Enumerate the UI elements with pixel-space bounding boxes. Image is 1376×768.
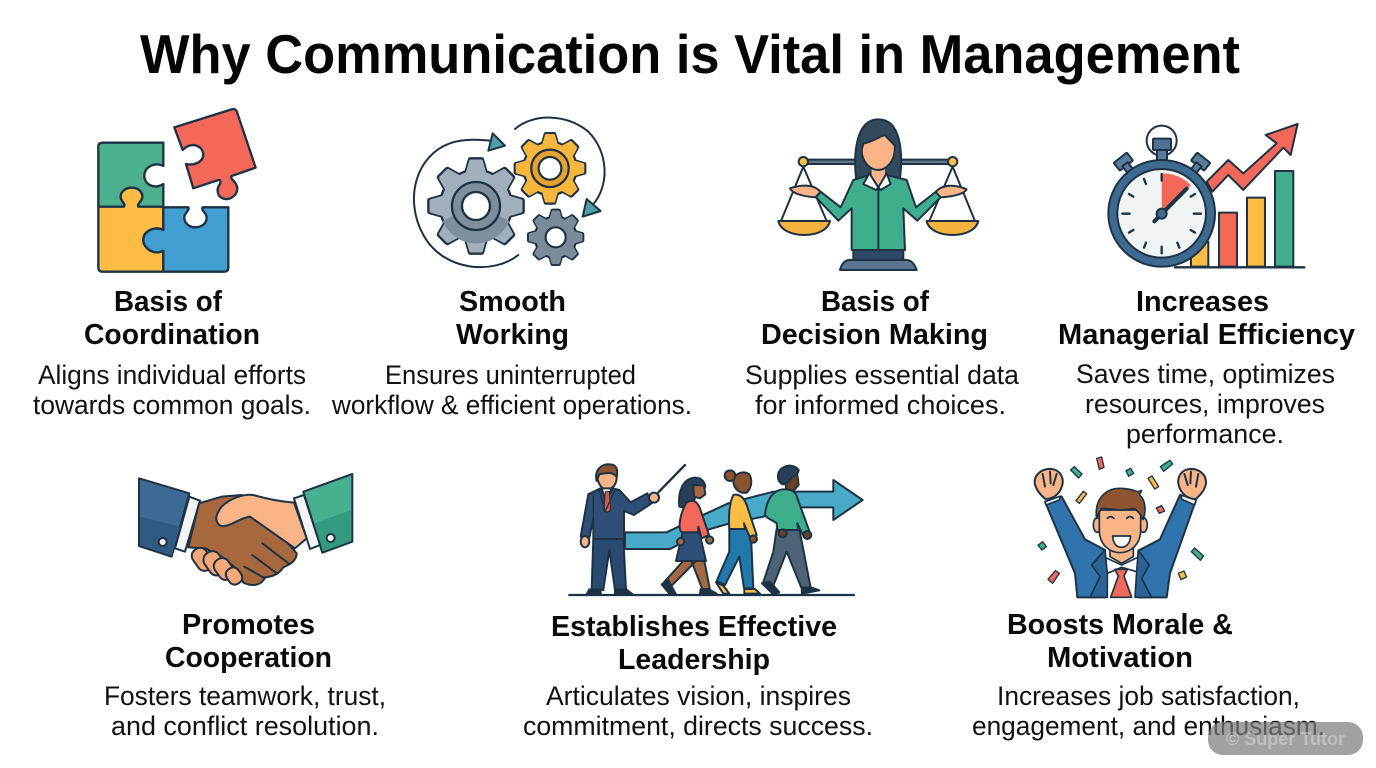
text: decision making description: Supplies essential data — [745, 360, 1019, 390]
heading: increases managerial efficiency: Managerial Efficiency — [1058, 319, 1355, 351]
watermark badge — [1208, 722, 1363, 755]
icon: gears with arrows — [414, 118, 605, 267]
icon: puzzle pieces — [98, 109, 256, 272]
icon: woman balancing scales — [778, 119, 978, 270]
heading: basis of decision making: Decision Making — [761, 319, 988, 351]
heading: basis of decision making: Basis of — [821, 286, 929, 318]
heading: establishes effective leadership: Establishes Effective — [551, 611, 837, 643]
heading: promotes cooperation: Promotes — [182, 609, 315, 641]
heading: promotes cooperation — [165, 609, 332, 674]
text: efficiency description: performance. — [1126, 419, 1284, 449]
icon: stopwatch and growth chart — [1108, 124, 1304, 267]
heading: increases managerial efficiency: Increases — [1136, 286, 1269, 318]
text: leadership description: commitment, directs success. — [523, 711, 873, 741]
text: efficiency description — [1076, 359, 1335, 449]
heading: smooth working: Working — [456, 319, 569, 351]
text: coordination description: towards common goals. — [33, 390, 311, 420]
text: efficiency description: resources, improves — [1085, 389, 1325, 419]
watermark badge: © Super Tutor — [1226, 729, 1345, 749]
heading: basis of coordination: Basis of — [114, 286, 222, 318]
panel: establishes effective leadership — [523, 464, 873, 741]
heading: basis of coordination: Coordination — [84, 319, 260, 351]
text: morale description: engagement, and enthusiasm. — [972, 711, 1325, 741]
panel: smooth working — [331, 118, 692, 420]
text: cooperation description: and conflict resolution. — [111, 711, 379, 741]
panel: basis of decision making — [745, 119, 1019, 420]
heading: smooth working: Smooth — [459, 286, 566, 318]
text: smooth working description: Ensures uninterrupted — [385, 360, 636, 390]
text: decision making description: for informed choices. — [755, 390, 1006, 420]
text: morale description: Increases job satisfaction, — [997, 681, 1300, 711]
heading: promotes cooperation: Cooperation — [165, 642, 332, 674]
heading: boosts morale and motivation: Boosts Morale & — [1007, 609, 1233, 641]
heading: basis of decision making — [761, 286, 988, 351]
text: leadership description: Articulates vision, inspires — [546, 681, 851, 711]
heading: smooth working — [456, 286, 569, 351]
text: coordination description — [33, 360, 311, 420]
heading: establishes effective leadership: Leadership — [618, 644, 770, 676]
text: cooperation description: Fosters teamwork, trust, — [104, 681, 386, 711]
heading: basis of coordination — [84, 286, 260, 351]
text: smooth working description — [331, 360, 692, 420]
icon: handshake — [139, 474, 352, 587]
panel: basis of coordination — [33, 109, 311, 420]
icon: celebrating man with confetti — [1035, 457, 1206, 597]
panel: boosts morale and motivation — [972, 457, 1325, 741]
text: efficiency description: Saves time, optimizes — [1076, 359, 1335, 389]
heading: boosts morale and motivation — [1007, 609, 1233, 674]
panel: promotes cooperation — [104, 474, 386, 741]
heading: increases managerial efficiency — [1058, 286, 1355, 351]
heading: boosts morale and motivation: Motivation — [1047, 642, 1193, 674]
heading: establishes effective leadership — [551, 611, 837, 676]
title: Why Communication is Vital in Management — [140, 23, 1240, 85]
text: smooth working description: workflow & efficient operations. — [331, 390, 692, 420]
text: leadership description — [523, 681, 873, 741]
text: coordination description: Aligns individual efforts — [38, 360, 306, 390]
text: cooperation description — [104, 681, 386, 741]
icon: leader guiding team — [569, 464, 863, 595]
text: decision making description — [745, 360, 1019, 420]
panel: increases managerial efficiency — [1058, 124, 1355, 449]
text: morale description — [972, 681, 1325, 741]
